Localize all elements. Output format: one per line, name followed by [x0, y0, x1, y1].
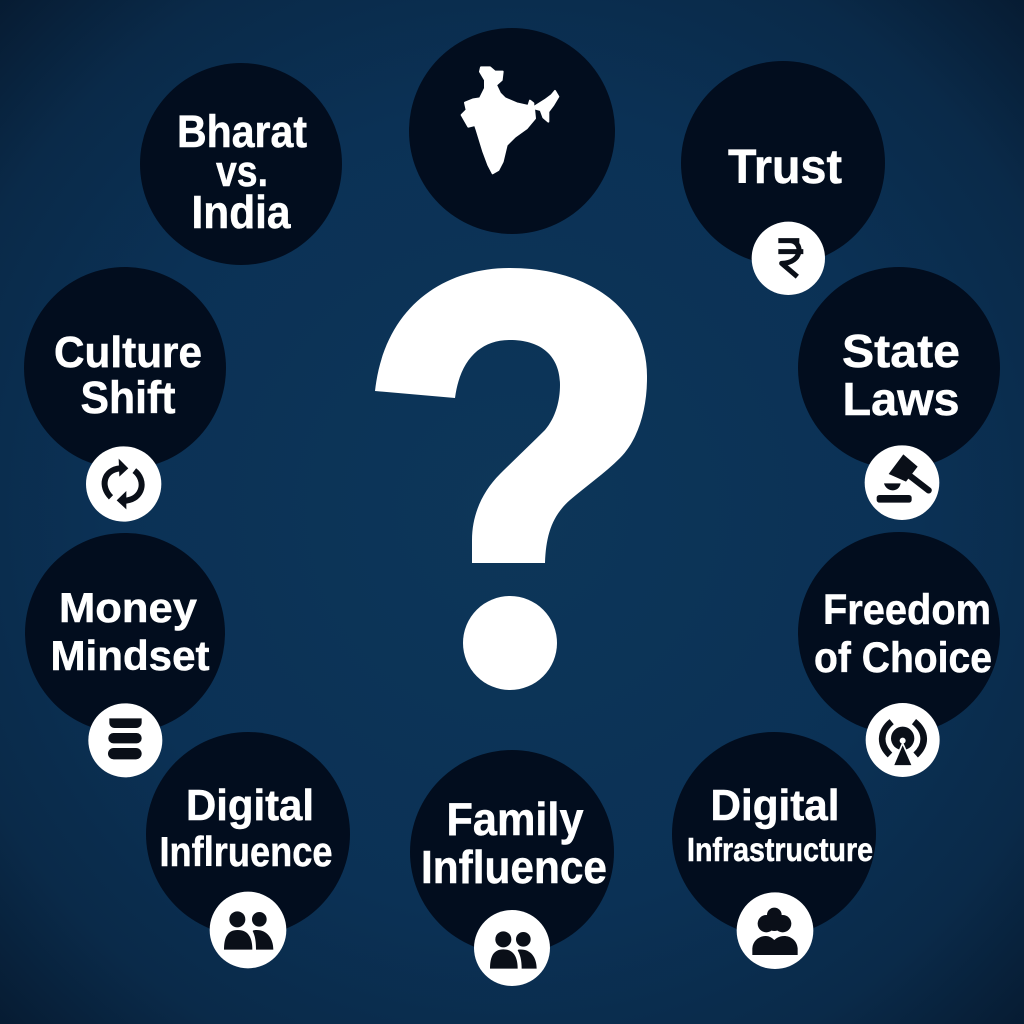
node: Digital Influence: Digital: [186, 781, 314, 830]
central question mark: [375, 268, 647, 690]
icon: stack badge: [88, 703, 162, 777]
icon: rupee badge: [752, 222, 825, 295]
node: Money Mindset: [25, 533, 225, 777]
icon: gavel badge: [865, 445, 939, 520]
node: Trust: [681, 61, 885, 295]
node: Digital Infrastructure: Infrastructure: [687, 831, 873, 868]
icon: person badge: [737, 892, 813, 969]
node: Bharat vs. India: [140, 63, 342, 265]
node: Bharat vs. India: Bharat: [177, 106, 307, 157]
node: Bharat vs. India: vs.: [216, 147, 268, 196]
icon: two people badge: [210, 892, 286, 968]
node: Family Influence: [410, 750, 614, 986]
icon: map of India: [462, 67, 558, 173]
icon: cycle arrows badge: [86, 446, 161, 522]
node: Freedom of Choice: Freedom: [823, 586, 991, 634]
node: Culture Shift: Shift: [80, 372, 176, 423]
node: Culture Shift: [24, 267, 226, 522]
node: State Laws: [798, 267, 1000, 520]
icon: broadcast tower badge: [866, 703, 940, 777]
node: Family Influence: Family: [446, 793, 584, 845]
node: Digital Influence: [146, 732, 350, 968]
node: Digital Influence: Inflruence: [160, 828, 332, 875]
node: Money Mindset: Mindset: [50, 632, 210, 679]
node: Culture Shift: Culture: [54, 328, 202, 377]
node: Trust: Trust: [728, 141, 842, 194]
node: Digital Infrastructure: Digital: [710, 781, 840, 830]
node: Freedom of Choice: of Choice: [814, 634, 992, 682]
node: State Laws: Laws: [842, 373, 960, 425]
icon: two people badge: [474, 910, 550, 986]
node: State Laws: State: [842, 325, 960, 377]
node: Family Influence: Influence: [421, 841, 607, 893]
node: Digital Infrastructure: [672, 732, 876, 969]
node: Freedom of Choice: [798, 532, 1000, 777]
node: Bharat vs. India: India: [192, 186, 291, 238]
node: India map: [409, 28, 615, 234]
node: Money Mindset: Money: [59, 584, 198, 631]
